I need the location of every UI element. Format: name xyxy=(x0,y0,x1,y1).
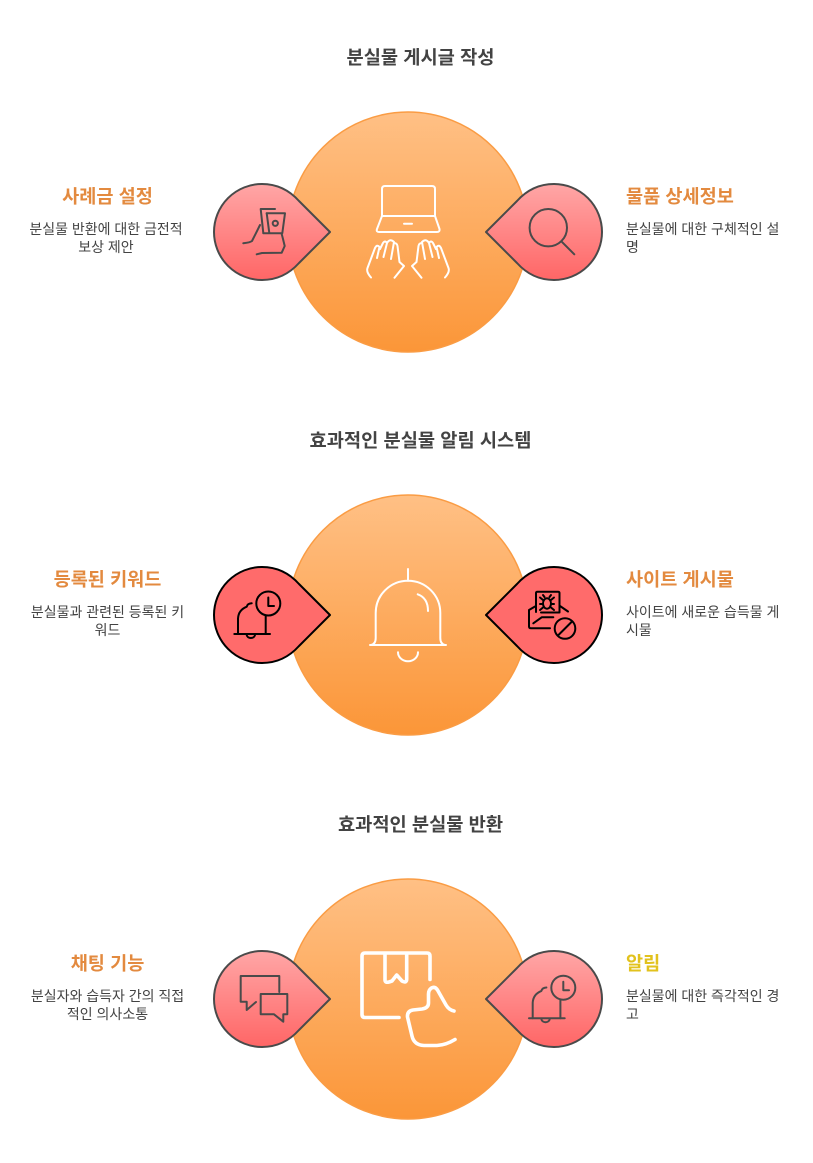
icon: mail with bug and block sign xyxy=(529,592,575,639)
right label: 사이트 게시물: 사이트 게시물 xyxy=(626,569,734,590)
icon: chat bubbles xyxy=(241,976,287,1022)
teardrop: alert icon xyxy=(486,951,602,1047)
icon: laptop and typing hands xyxy=(367,186,449,278)
title: 효과적인 분실물 반환: 효과적인 분실물 반환 xyxy=(338,814,503,835)
left label: 등록된 키워드 xyxy=(31,569,184,638)
left label: 사례금 설정: 보상 제안 xyxy=(78,239,134,255)
left label: 사례금 설정: 사례금 설정 xyxy=(62,186,153,207)
left label: 채팅 기능 xyxy=(31,953,184,1022)
teardrop: bell clock icon xyxy=(214,567,330,663)
right label: 물품 상세정보 xyxy=(626,186,779,255)
diagram: 효과적인 분실물 알림 시스템 xyxy=(214,495,602,735)
diagram: 효과적인 분실물 반환 xyxy=(214,879,602,1119)
central circle xyxy=(288,112,528,352)
icon: parcel box and hand xyxy=(362,953,455,1046)
left label: 사례금 설정 xyxy=(29,186,183,255)
left label: 채팅 기능: 적인 의사소통 xyxy=(67,1006,148,1022)
left label: 사례금 설정: 분실물 반환에 대한 금전적 xyxy=(29,221,183,237)
icon: bell with clock xyxy=(529,976,575,1022)
teardrop: blocked mail icon xyxy=(486,567,602,663)
central circle xyxy=(288,495,528,735)
left label: 등록된 키워드: 워드 xyxy=(95,622,120,638)
teardrop: chat icon xyxy=(214,951,330,1047)
icon: hand holding money xyxy=(243,209,285,254)
central circle xyxy=(288,879,528,1119)
right label: 물품 상세정보: 물품 상세정보 xyxy=(626,186,734,207)
right label: 사이트 게시물 xyxy=(626,569,779,638)
diagram: 분실물 게시글 작성 xyxy=(214,112,602,352)
right label: 알림: 고 xyxy=(626,1006,639,1022)
left label: 채팅 기능: 분실자와 습득자 간의 직접 xyxy=(31,988,184,1004)
right label: 알림 xyxy=(626,953,779,1022)
title: 분실물 게시글 작성: 분실물 게시글 작성 xyxy=(347,47,494,68)
title: 효과적인 분실물 알림 시스템: 효과적인 분실물 알림 시스템 xyxy=(310,430,531,451)
teardrop: magnifier icon xyxy=(486,184,602,280)
right label: 사이트 게시물: 사이트에 새로운 습득물 게 xyxy=(626,604,779,620)
icon: bell xyxy=(370,569,446,661)
right label: 알림: 알림 xyxy=(626,953,660,974)
icon: magnifier xyxy=(530,209,574,254)
left label: 등록된 키워드: 분실물과 관련된 등록된 키 xyxy=(31,604,184,620)
teardrop: money icon xyxy=(214,184,330,280)
left label: 등록된 키워드: 등록된 키워드 xyxy=(54,569,161,590)
right label: 물품 상세정보: 명 xyxy=(626,239,639,255)
right label: 물품 상세정보: 분실물에 대한 구체적인 설 xyxy=(626,221,779,237)
right label: 알림: 분실물에 대한 즉각적인 경 xyxy=(626,988,779,1004)
icon: bell with clock xyxy=(234,592,280,638)
right label: 사이트 게시물: 시물 xyxy=(626,622,652,638)
left label: 채팅 기능: 채팅 기능 xyxy=(71,953,144,974)
